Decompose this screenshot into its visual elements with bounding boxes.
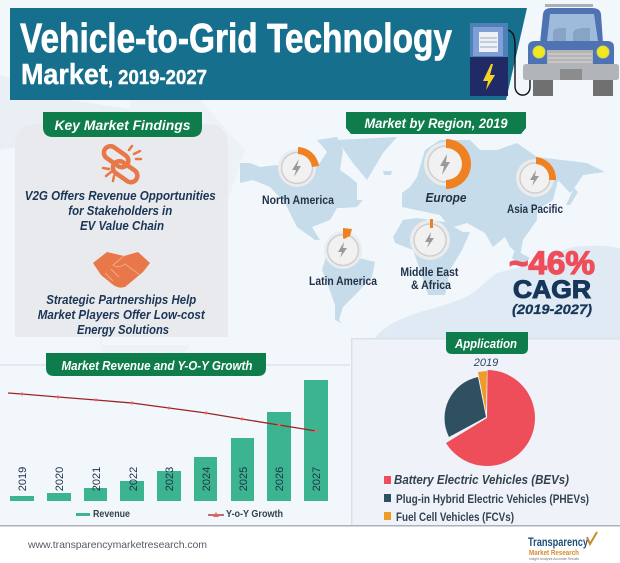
world map (240, 137, 605, 323)
title banner (10, 8, 527, 100)
callout: CAGR (509, 245, 595, 317)
heading: Market by Region, 2019 (346, 112, 526, 134)
slice: BEVs (446, 370, 535, 466)
label: CAGR: CAGR (513, 276, 591, 304)
axis: year labels: 2021 (91, 467, 103, 491)
legend: growth: Y-o-Y Growth (226, 508, 283, 520)
heading: Application (446, 332, 528, 354)
label: Middle East and Africa: Middle East (400, 267, 459, 279)
slice: FCVs (478, 371, 487, 412)
label: Asia Pacific: Asia Pacific (507, 204, 564, 216)
label: period: (2019-2027) (512, 301, 592, 317)
label: Latin America: Latin America (309, 276, 378, 288)
logo: Transparency Market Research (528, 532, 597, 561)
legend: growth (208, 508, 283, 520)
chart: application pie (445, 370, 535, 466)
panel: key market findings (15, 112, 228, 337)
icon: charging station (470, 23, 530, 96)
line: Y-o-Y growth (8, 392, 318, 432)
label: pie year: 2019 (473, 357, 498, 369)
heading: Application: Application (454, 336, 517, 351)
text: partnerships finding: Energy Solutions (77, 323, 169, 337)
icon: broken chain link (101, 144, 141, 185)
label: Europe: Europe (426, 190, 466, 205)
slice: PHEVs (445, 377, 486, 437)
heading: Key Market Findings: Key Market Findings (54, 117, 191, 133)
axis: year labels: 2026 (274, 467, 286, 491)
text: V2G finding: EV Value Chain (80, 219, 164, 233)
text: partnerships finding: Market Players Offer Low-cost (38, 308, 206, 322)
label: Middle East and Africa: & Africa (411, 280, 452, 292)
axis: year labels: 2020 (54, 467, 66, 491)
logo: Transparency Market Research: Transparency (528, 537, 588, 549)
icon: front view car (523, 4, 619, 96)
footer url: www.transparencymarketresearch.com (27, 539, 207, 551)
subtitle: Market, 2019-2027: Market, 2019-2027 (21, 59, 207, 91)
gauge: Middle East and Africa (410, 219, 450, 260)
legend: revenue: Revenue (93, 508, 130, 520)
label: North America: North America (262, 195, 335, 207)
icon: handshake (93, 252, 150, 288)
bars: revenue (10, 380, 328, 501)
axis: year labels: 2022 (128, 467, 140, 491)
text: partnerships finding: Strategic Partnerships Help (46, 293, 197, 307)
legend item: FCVs: Fuel Cell Vehicles (FCVs) (396, 512, 514, 524)
heading: Market by Region, 2019: Market by Region, 2019 (364, 116, 508, 131)
axis: year labels: 2019 (17, 467, 29, 491)
legend: revenue (76, 508, 130, 520)
logo: Transparency Market Research: Market Research (529, 548, 579, 557)
value: ~46%: ~46% (509, 245, 595, 281)
legend item: PHEVs: Plug-in Hybrid Electric Vehicles (PHEVs) (396, 494, 589, 506)
text: V2G finding: for Stakeholders in (68, 204, 173, 218)
gauge: Latin America (324, 228, 362, 269)
logo: Transparency Market Research: Insight Analysis Accurate Results (529, 557, 579, 561)
legend: application (384, 472, 589, 524)
axis: year labels (17, 467, 323, 491)
chart: revenue bars and growth line (8, 380, 328, 520)
text: V2G finding: V2G Offers Revenue Opportunities (25, 189, 216, 203)
heading: Market Revenue and Y-O-Y Growth (46, 353, 266, 376)
axis: year labels: 2024 (201, 467, 213, 491)
gauge: Asia Pacific (516, 157, 556, 197)
gauge: North America (278, 147, 319, 187)
gauge: Europe (424, 139, 471, 189)
axis: year labels: 2023 (164, 467, 176, 491)
axis: year labels: 2025 (238, 467, 250, 491)
axis: year labels: 2027 (311, 467, 323, 491)
title: Vehicle-to-Grid Technology: Vehicle-to-Grid Technology (20, 15, 452, 61)
heading: Market Revenue and Y-O-Y Growth: Market Revenue and Y-O-Y Growth (62, 358, 253, 373)
heading: Key Market Findings (43, 112, 202, 137)
legend item: BEVs: Battery Electric Vehicles (BEVs) (394, 472, 569, 487)
